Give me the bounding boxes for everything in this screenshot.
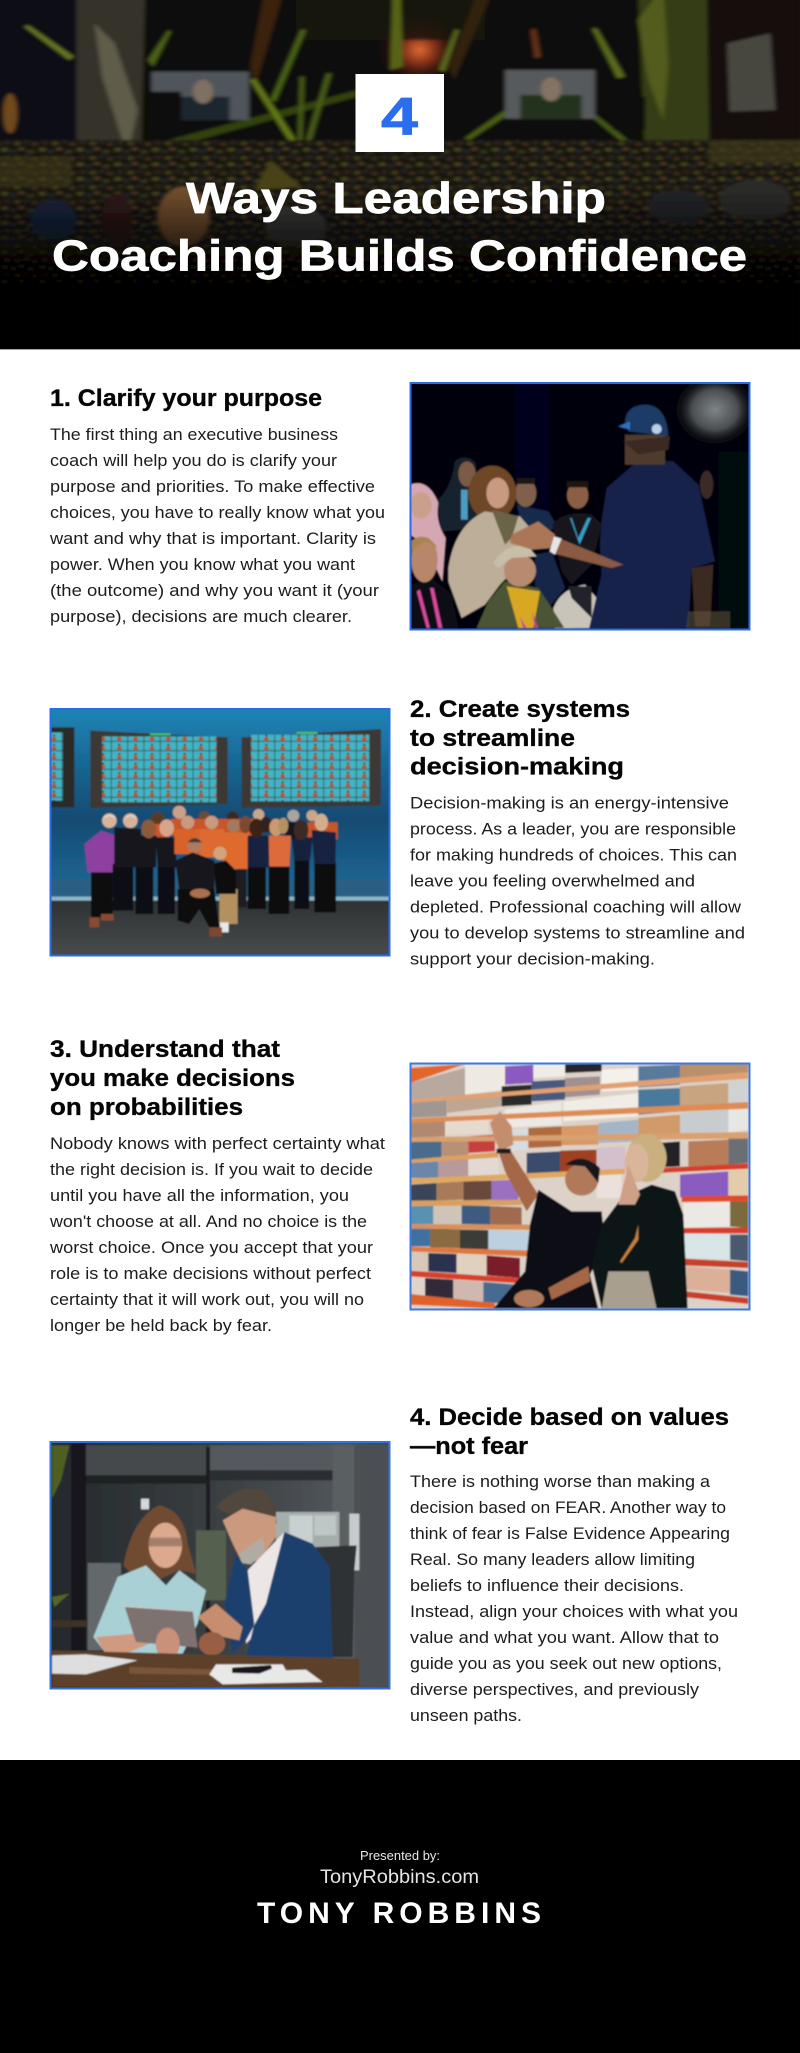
body text 3: won't choose at all. And no choice is the — [49, 1212, 367, 1231]
body text 4: diverse perspectives, and previously — [410, 1680, 700, 1699]
number badge: 4 — [381, 88, 419, 146]
heading 3 — [50, 1036, 295, 1121]
body text 4: beliefs to influence their decisions. — [410, 1576, 684, 1595]
heading 2: decision-making — [410, 754, 624, 780]
website: TonyRobbins.com — [320, 1867, 479, 1888]
man raising hand — [490, 1111, 605, 1309]
body text 4: Instead, align your choices with what you — [410, 1602, 738, 1621]
section 2: create systems — [46, 696, 745, 968]
body text 2: you to develop systems to streamline and — [410, 924, 745, 942]
body text 4: think of fear is False Evidence Appearing — [410, 1524, 730, 1543]
section 3: probabilities — [49, 1036, 755, 1335]
standing team — [84, 813, 336, 927]
heading 4 — [410, 1404, 729, 1460]
body text 1: The first thing an executive business — [50, 425, 338, 444]
body text 1: coach will help you do is clarify your — [50, 451, 337, 470]
body text 1: power. When you know what you want — [50, 555, 355, 574]
body text 2: support your decision-making. — [410, 950, 655, 968]
body text 4: value and what you want. Allow that to — [410, 1628, 719, 1647]
body text 1: (the outcome) and why you want it (your — [50, 581, 379, 600]
woman — [93, 1505, 206, 1654]
heading 2 — [410, 696, 630, 780]
body text 1 — [49, 425, 385, 626]
body text 1: purpose), decisions are much clearer. — [50, 607, 352, 626]
body text 3: longer be held back by fear. — [50, 1316, 272, 1335]
presented by label: Presented by: — [360, 1848, 440, 1863]
photo: speaker addressing audience — [405, 373, 757, 634]
body text 2: leave you feeling overwhelmed and — [410, 872, 695, 890]
photo: two presenters before wall of video screens — [405, 1058, 755, 1314]
body text 4: There is nothing worse than making a — [410, 1472, 711, 1491]
title: Coaching Builds Confidence — [52, 232, 747, 280]
body text 1: choices, you have to really know what you — [50, 503, 385, 522]
body text 4 — [410, 1472, 738, 1725]
woman with praying hands — [592, 1134, 688, 1309]
body text 2: Decision-making is an energy-intensive — [410, 794, 729, 812]
body text 4: decision based on FEAR. Another way to — [410, 1498, 726, 1517]
body text 3: the right decision is. If you wait to decide — [50, 1160, 373, 1179]
kneeling front pair — [175, 838, 238, 937]
shelves — [410, 1064, 748, 1309]
heading 4: 4. Decide based on values — [410, 1404, 729, 1431]
number badge — [356, 74, 444, 152]
wall tiles — [410, 1063, 748, 1305]
body text 2: process. As a leader, you are responsible — [410, 820, 736, 838]
photo: team in front of virtual screens — [46, 704, 396, 960]
heading 3: 3. Understand that — [50, 1036, 280, 1063]
footer — [0, 1760, 800, 2053]
body text 4: Real. So many leaders allow limiting — [410, 1550, 695, 1569]
body text 1: purpose and priorities. To make effective — [50, 477, 375, 496]
title — [52, 174, 747, 280]
body text 1: want and why that is important. Clarity is — [49, 529, 376, 548]
title: Ways Leadership — [186, 174, 606, 223]
hero banner — [0, 0, 800, 366]
body text 4: guide you as you seek out new options, — [410, 1654, 722, 1673]
table and papers — [52, 1650, 359, 1687]
heading 3: on probabilities — [50, 1094, 243, 1121]
back row — [149, 806, 338, 839]
body text 2: for making hundreds of choices. This can — [410, 846, 737, 864]
logo wordmark: TONY ROBBINS — [257, 1897, 541, 1930]
body text 3: until you have all the information, you — [50, 1186, 349, 1205]
heading 4: —not fear — [410, 1433, 528, 1460]
man — [198, 1489, 333, 1659]
tablet — [124, 1605, 198, 1660]
heading 1: 1. Clarify your purpose — [50, 385, 322, 412]
heading 3: you make decisions — [50, 1065, 295, 1092]
body text 3: role is to make decisions without perfect — [50, 1264, 371, 1283]
body text 4: unseen paths. — [410, 1706, 522, 1725]
body text 2: depleted. Professional coaching will allow — [410, 898, 742, 916]
body text 3: certainty that it will work out, you will no — [50, 1290, 364, 1309]
heading 2: 2. Create systems — [410, 696, 630, 723]
body text 2 — [410, 794, 745, 968]
body text 3: worst choice. Once you accept that your — [49, 1238, 373, 1257]
body text 3: Nobody knows with perfect certainty what — [50, 1134, 385, 1153]
heading 2: to streamline — [410, 725, 575, 752]
section 1: clarify your purpose — [49, 373, 757, 634]
section 4: decide based on values — [46, 1404, 738, 1725]
body text 3 — [49, 1134, 385, 1335]
hero photo: arena crowd and stage lights — [0, 0, 800, 366]
photo: two colleagues reviewing a tablet — [46, 1437, 396, 1693]
